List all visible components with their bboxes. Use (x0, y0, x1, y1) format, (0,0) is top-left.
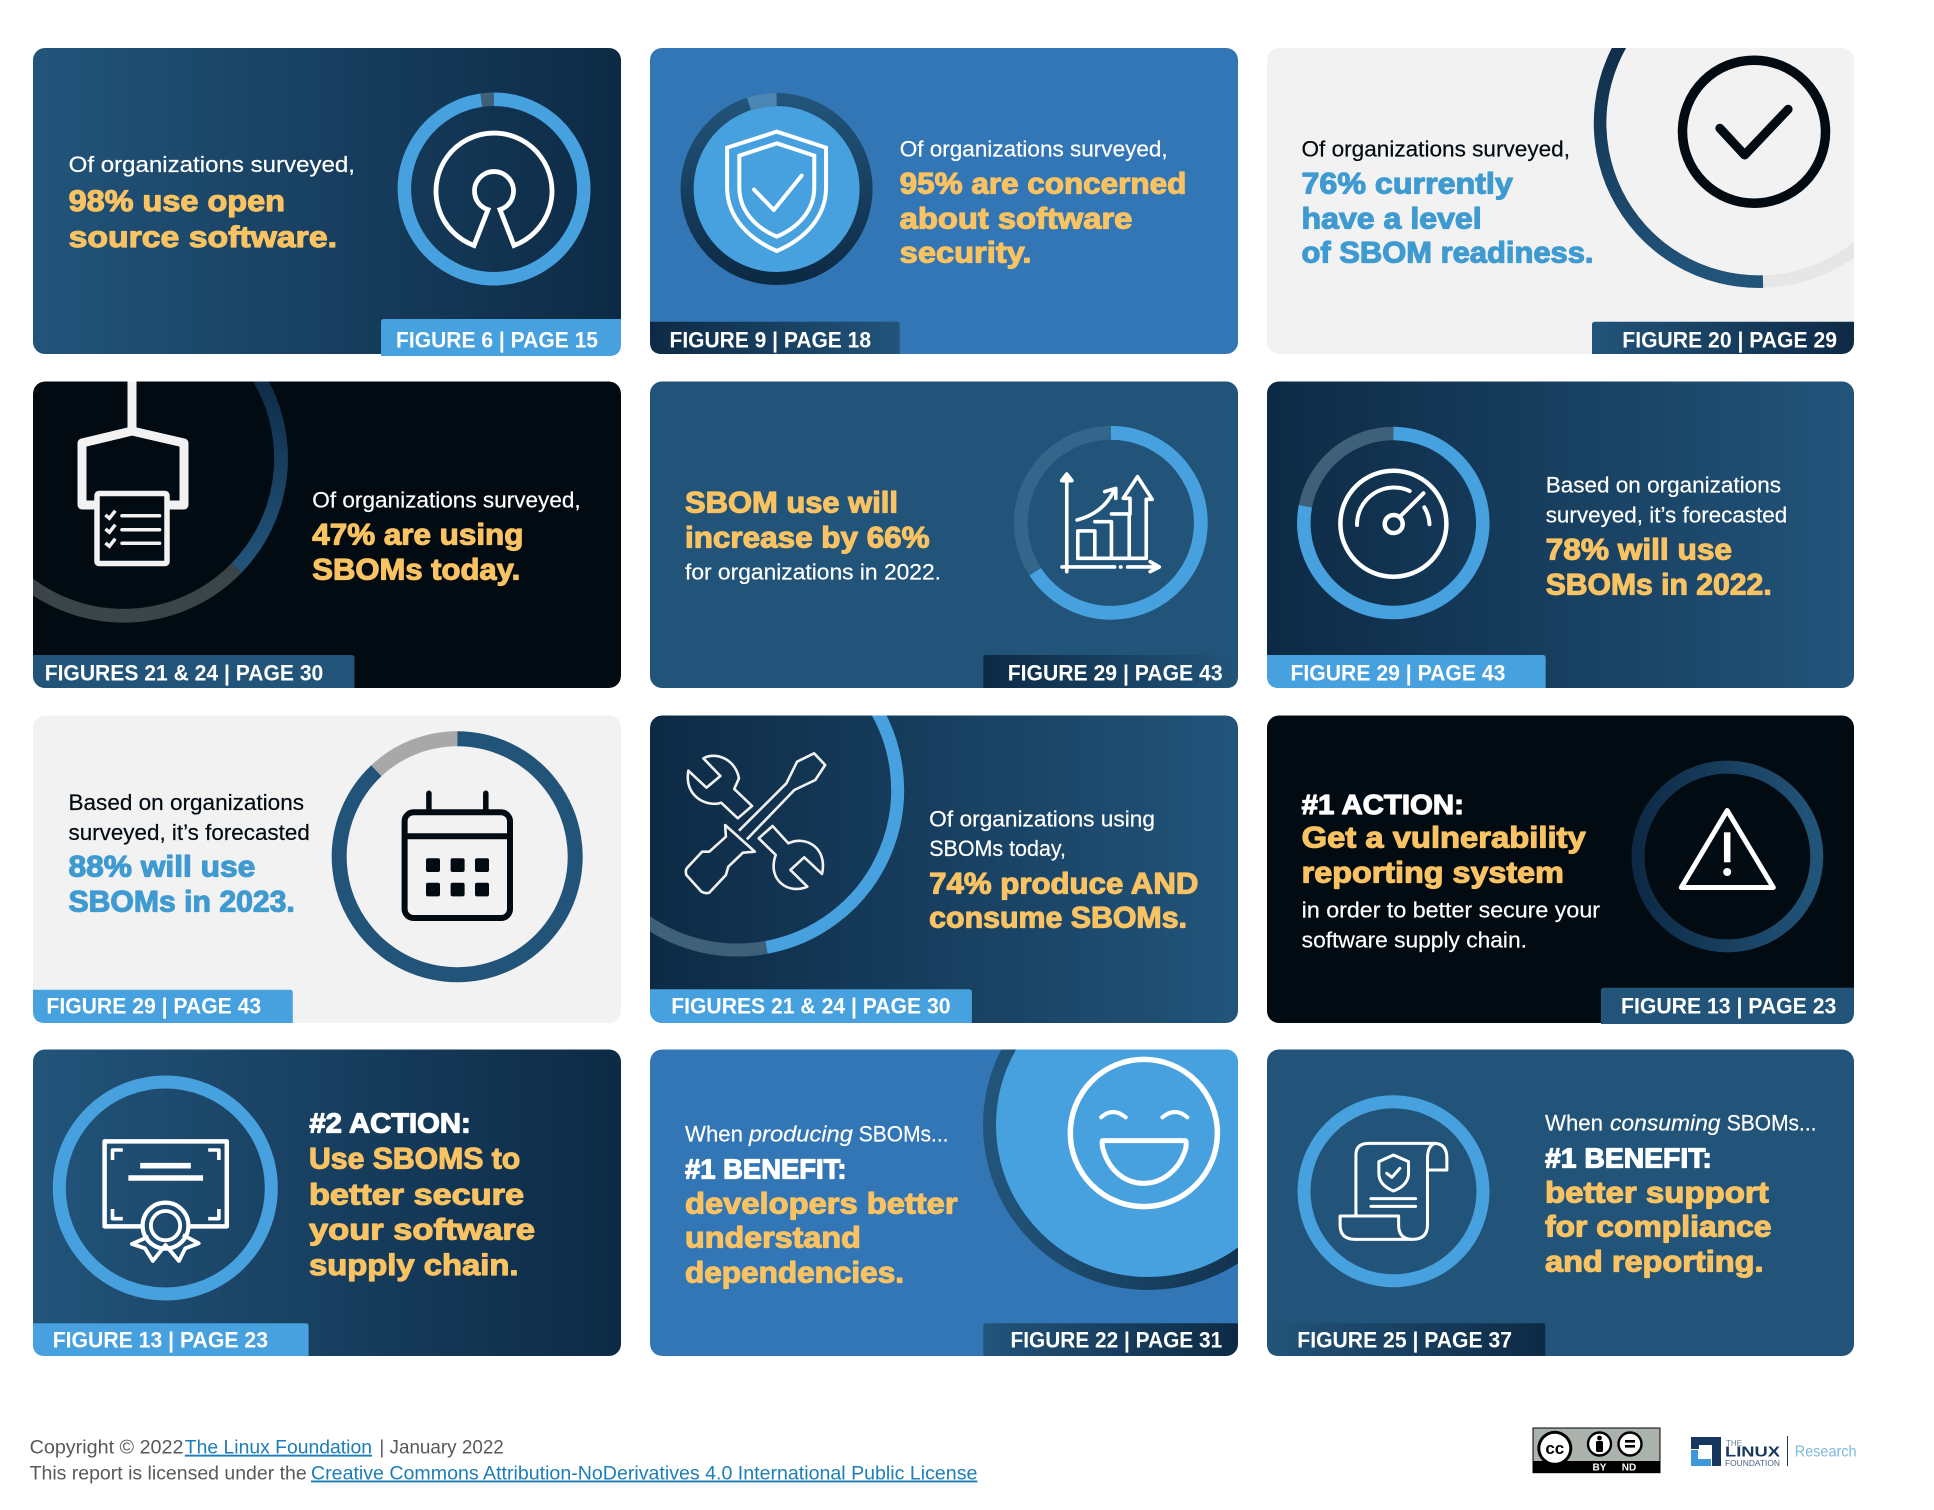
text block: for compliance (1545, 1211, 1772, 1244)
figure tag (1601, 988, 1854, 1024)
footer: copyright text (30, 1438, 977, 1484)
icon: scroll with shield (1340, 1143, 1447, 1239)
figure tag: FIGURE 29 | PAGE 43 (1008, 661, 1223, 686)
text block: Of organizations surveyed, (900, 137, 1168, 162)
text block: surveyed, it’s forecasted (68, 820, 310, 845)
text block: Of organizations surveyed, (312, 487, 581, 512)
panel: consuming SBOMs benefit (1267, 1050, 1854, 1356)
figure tag (33, 655, 354, 688)
panel: 98% use open source (33, 48, 621, 356)
logo: The Linux Foundation Research: LINUX (1725, 1444, 1780, 1461)
text block (900, 137, 1186, 269)
text block: source software. (69, 221, 337, 254)
text block: #2 ACTION: (309, 1108, 471, 1139)
text block: Of organizations surveyed, (1302, 137, 1570, 162)
icon: laughing face (1070, 1059, 1217, 1207)
ring (1304, 1102, 1483, 1281)
icon: speedometer (1340, 471, 1446, 577)
figure tag (650, 322, 900, 354)
card background (650, 48, 1238, 354)
icon: calendar (404, 793, 510, 918)
logo: The Linux Foundation Research (1691, 1436, 1856, 1468)
text block: When (1545, 1110, 1603, 1136)
text block: software supply chain. (1302, 928, 1527, 953)
text block: consume SBOMs. (929, 901, 1187, 934)
figure tag: FIGURE 9 | PAGE 18 (670, 328, 871, 353)
figure tag (381, 319, 621, 356)
figure tag: FIGURES 21 & 24 | PAGE 30 (671, 994, 950, 1019)
text block (68, 790, 310, 919)
text block: about software (900, 202, 1132, 235)
badge: Creative Commons BY-ND: ND (1622, 1463, 1636, 1474)
card background (1267, 1050, 1854, 1356)
figure tag: FIGURE 25 | PAGE 37 (1297, 1328, 1512, 1352)
figure tag (983, 655, 1238, 688)
text block: reporting system (1302, 857, 1564, 890)
text block: 47% are using (312, 518, 523, 551)
panel: 88% will use SBOMs in 2023 (33, 716, 621, 1023)
figure tag: FIGURE 13 | PAGE 23 (53, 1328, 268, 1352)
badge: Creative Commons BY-ND: cc (1545, 1439, 1564, 1458)
text block: SBOMs... (1727, 1110, 1816, 1136)
ring (1638, 767, 1817, 946)
figure tag (33, 990, 293, 1023)
card background (33, 1050, 621, 1356)
text block: Of organizations surveyed, (69, 152, 355, 177)
footer: copyright text: This report is licensed under the (30, 1464, 307, 1484)
figure tag (1267, 1323, 1545, 1356)
text block: Based on organizations (68, 790, 304, 815)
text block: 98% use open (69, 185, 285, 218)
text block (312, 487, 581, 586)
footer: copyright text: The Linux Foundation (185, 1438, 372, 1459)
icon: certificate with ribbon (105, 1141, 227, 1261)
text block (1302, 137, 1594, 269)
figure tag (1592, 322, 1854, 354)
figure tag: FIGURE 13 | PAGE 23 (1621, 994, 1836, 1019)
figure tag (1267, 655, 1546, 688)
text block: #1 BENEFIT: (1545, 1143, 1712, 1174)
text block: SBOM use will (685, 486, 898, 519)
text block: your software (309, 1214, 535, 1247)
figure tag (983, 1323, 1238, 1356)
donut ring 98% (404, 99, 584, 279)
donut ring 95% with disc (687, 100, 866, 278)
large disc with ring (983, 1050, 1238, 1290)
icon: open source logo (436, 133, 552, 246)
text block: #1 BENEFIT: (685, 1153, 846, 1184)
text block: increase by 66% (685, 522, 930, 555)
text block: 76% currently (1302, 167, 1513, 200)
footer: copyright text: Creative Commons Attribution-NoDerivatives 4.0 International Public License (311, 1464, 977, 1484)
panel: producing SBOMs benefit (650, 1050, 1238, 1356)
panel: #2 action (33, 1050, 621, 1356)
panel: 74% produce and consume (640, 700, 1238, 1023)
text block: understand (685, 1222, 861, 1255)
large ring 74% (640, 700, 898, 950)
figure tag: FIGURE 29 | PAGE 43 (46, 994, 261, 1019)
logo: The Linux Foundation Research: Research (1795, 1444, 1856, 1461)
icon: growth chart (1062, 474, 1159, 572)
text block: SBOMs... (859, 1122, 948, 1147)
text block: Based on organizations (1546, 473, 1781, 498)
text block (685, 486, 941, 584)
card background (650, 1050, 1238, 1356)
figure tag: FIGURE 6 | PAGE 15 (396, 328, 598, 353)
text block: SBOMs in 2022. (1546, 568, 1772, 601)
text block (1302, 789, 1601, 953)
text block: dependencies. (685, 1256, 904, 1289)
text block: better support (1545, 1177, 1769, 1210)
card background (1267, 716, 1854, 1023)
icon: check in circle (1682, 60, 1826, 203)
text block: #1 ACTION: (1302, 789, 1464, 820)
footer: copyright text: | January 2022 (379, 1438, 504, 1459)
text block: Use SBOMS to (309, 1142, 520, 1175)
panel: 95% concerned about security (650, 48, 1238, 354)
text block: developers better (685, 1187, 958, 1220)
figure tag: FIGURE 29 | PAGE 43 (1290, 661, 1505, 686)
donut ring 78% (1304, 433, 1483, 613)
text block (69, 152, 355, 254)
logo: The Linux Foundation Research: FOUNDATION (1725, 1458, 1780, 1468)
figure tag: FIGURE 22 | PAGE 31 (1010, 1328, 1222, 1352)
badge: Creative Commons BY-ND: BY (1593, 1463, 1607, 1474)
card background (650, 382, 1238, 688)
text block: of SBOM readiness. (1302, 236, 1594, 269)
icon: crane holding checklist (82, 381, 184, 564)
ring (59, 1082, 271, 1294)
panel: #1 action (1267, 716, 1854, 1024)
text block: producing (748, 1122, 853, 1147)
text block: SBOMs today, (929, 836, 1066, 861)
icon: crossed wrench and screwdriver (686, 753, 825, 893)
text block: have a level (1302, 202, 1482, 236)
panel: 78% will use SBOMs in 2022 (1267, 382, 1854, 688)
text block (685, 1122, 958, 1289)
card background (33, 716, 621, 1023)
text block: SBOMs in 2023. (68, 886, 295, 919)
text block: security. (900, 236, 1031, 269)
donut ring 88% (339, 739, 575, 975)
text block (1546, 473, 1787, 601)
text block: Get a vulnerability (1302, 821, 1586, 854)
icon: warning triangle (1681, 810, 1773, 888)
text block: for organizations in 2022. (685, 560, 941, 584)
large ring 47% (20, 370, 281, 616)
card background (1267, 48, 1854, 354)
badge: Creative Commons BY-ND (1533, 1428, 1660, 1474)
card background (33, 382, 621, 688)
panel: SBOM use increases 66% (650, 382, 1238, 688)
icon: shield with check (727, 132, 826, 251)
text block: When (685, 1122, 743, 1147)
text block (1545, 1110, 1816, 1279)
logo: The Linux Foundation Research: THE (1726, 1438, 1742, 1448)
text block: supply chain. (309, 1249, 518, 1282)
figure tag: FIGURES 21 & 24 | PAGE 30 (45, 661, 323, 686)
figure tag (33, 1323, 309, 1356)
figure tag: FIGURE 20 | PAGE 29 (1622, 328, 1837, 353)
panel: 47% using SBOMs today (20, 370, 621, 688)
large ring 76% (1594, 48, 1854, 288)
panel: 76% SBOM readiness (1267, 48, 1854, 354)
text block: better secure (309, 1178, 524, 1211)
text block: and reporting. (1545, 1246, 1764, 1279)
card background (33, 48, 621, 354)
text block (309, 1108, 535, 1282)
footer: copyright text: Copyright © 2022 (30, 1438, 183, 1459)
figure tag (650, 989, 972, 1023)
text block: 88% will use (68, 851, 255, 884)
text block: consuming (1610, 1110, 1721, 1136)
card background (1267, 382, 1854, 688)
donut ring 66% (1021, 433, 1201, 613)
text block: 95% are concerned (900, 167, 1186, 200)
card background (650, 716, 1238, 1023)
text block: SBOMs today. (312, 553, 520, 586)
text block: 78% will use (1546, 533, 1732, 566)
text block: Of organizations using (929, 806, 1155, 832)
text block: surveyed, it’s forecasted (1546, 503, 1787, 528)
text block (929, 806, 1198, 934)
text block: in order to better secure your (1302, 898, 1601, 923)
text block: 74% produce AND (929, 867, 1198, 900)
